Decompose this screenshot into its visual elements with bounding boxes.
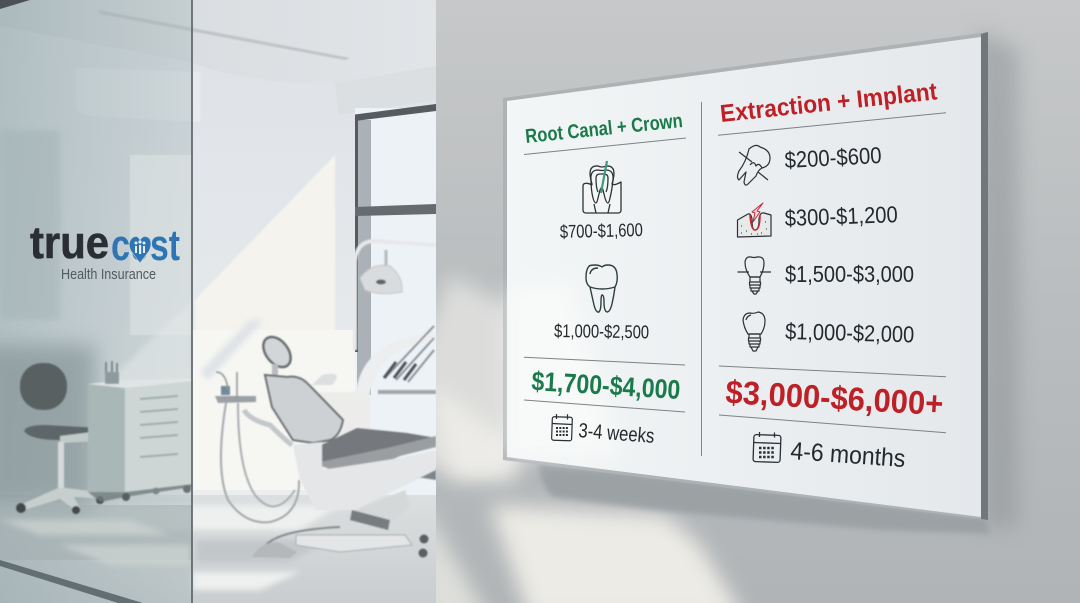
icon: extracted tooth [738, 145, 770, 185]
logo heart icon [129, 236, 151, 263]
air conditioner [76, 68, 200, 122]
logo: truecost Health Insurance [30, 217, 180, 283]
total: extraction + implant: $3,000-$6,000+ [725, 373, 944, 422]
logo: truecost Health Insurance: Health Insurance [61, 267, 156, 283]
floor edge seen through glass [0, 560, 143, 603]
stool [16, 363, 106, 514]
sun on far wall [192, 330, 355, 490]
icon: crown tooth [586, 265, 617, 312]
icon: calendar [753, 432, 781, 462]
heading: extraction + implant: Extraction + Implant [719, 78, 938, 128]
total: root canal + crown: $1,700-$4,000 [531, 366, 681, 405]
icon: implant [738, 257, 771, 294]
board frame [503, 32, 988, 520]
glass reflections [0, 0, 192, 565]
pricing board [503, 32, 988, 520]
price: implant: $1,500-$3,000 [785, 261, 914, 287]
icon: root canal [583, 161, 621, 213]
sunlight on wall [195, 155, 335, 400]
heading: root canal + crown: Root Canal + Crown [524, 110, 684, 148]
instrument arm and hanging tools [310, 326, 436, 480]
icon: calendar [552, 414, 572, 441]
board surface [507, 37, 981, 517]
column divider [700, 102, 702, 456]
logo: truecost Health Insurance: o [131, 227, 148, 268]
duration: 4-6 months: 4-6 months [790, 437, 906, 473]
chair seat [317, 428, 436, 467]
chair headrest [258, 332, 296, 372]
logo: truecost Health Insurance: true [30, 217, 109, 268]
chair pedestal [293, 442, 436, 510]
price: crown: $1,000-$2,500 [554, 320, 649, 342]
panel: root canal + crown [524, 110, 686, 448]
ceiling [0, 0, 436, 83]
logo: truecost Health Insurance: st [150, 221, 180, 270]
icon: implant crown [743, 312, 765, 351]
price: bone graft: $300-$1,200 [784, 201, 898, 231]
board drop shadow [538, 462, 990, 534]
logo: truecost Health Insurance: c [111, 221, 130, 270]
duration: 3-4 weeks: 3-4 weeks [578, 419, 655, 448]
price: implant crown: $1,000-$2,000 [785, 318, 915, 347]
panel: extraction + implant [718, 78, 946, 473]
price: root canal: $700-$1,600 [560, 219, 643, 242]
dental tray and hoses [215, 372, 299, 522]
dental lamp [355, 241, 436, 350]
floor [0, 495, 436, 603]
ceiling light slot [98, 10, 350, 60]
glass edge line [191, 0, 193, 603]
chair backrest [265, 375, 343, 443]
sunlight on wall [420, 30, 1018, 603]
cart [88, 361, 192, 502]
wall [436, 0, 1080, 603]
glass partition tint [0, 0, 192, 603]
window [355, 104, 436, 528]
dental chair [252, 332, 436, 558]
icon: bone graft [738, 203, 771, 237]
price: extraction: $200-$600 [784, 142, 882, 173]
dental room background [0, 0, 436, 603]
